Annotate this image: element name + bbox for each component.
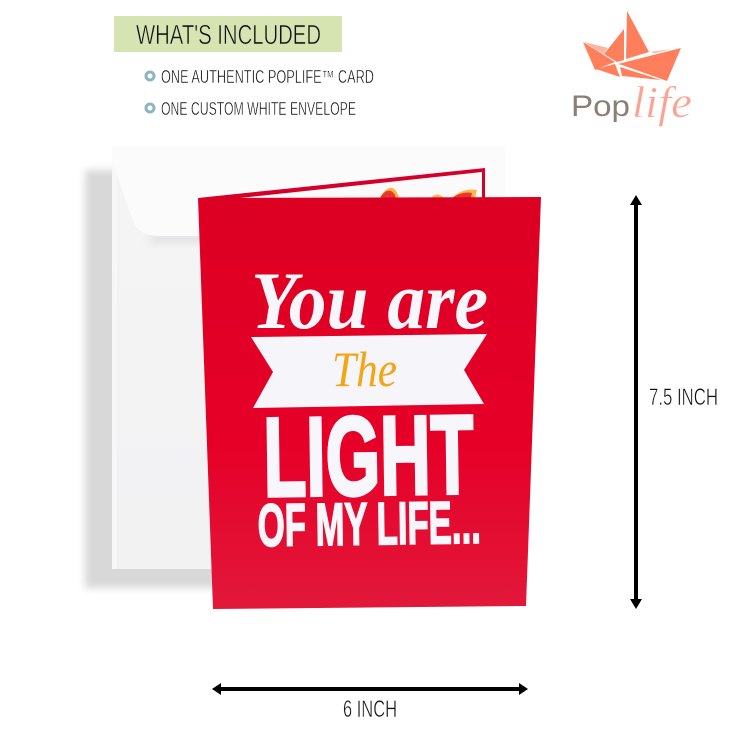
list: included items	[146, 67, 374, 119]
list: included items: ONE AUTHENTIC POPLIFE™ CARD	[161, 67, 374, 87]
logo: Poplife: life	[632, 78, 692, 127]
card front	[198, 197, 541, 609]
logo: Poplife	[571, 11, 692, 127]
hearts peeking	[380, 188, 399, 198]
flap shadow	[150, 236, 210, 242]
ribbon banner	[251, 334, 487, 408]
envelope shadow	[85, 170, 220, 588]
card text: You are: You are	[251, 255, 488, 346]
card back leaf	[198, 168, 485, 198]
card text: LIGHT: LIGHT	[263, 393, 474, 521]
wordmark: Pop	[571, 90, 630, 123]
label: 6 inch: 6 INCH	[343, 696, 397, 723]
envelope body	[112, 146, 505, 569]
card text: OF MY LIFE: OF MY LIFE...	[257, 489, 481, 559]
heading: what's included: WHAT'S INCLUDED	[136, 19, 321, 50]
card text: The: The	[332, 341, 397, 397]
list: included items: ONE CUSTOM WHITE ENVELOPE	[161, 99, 356, 119]
icon: origami boat	[583, 11, 681, 81]
envelope	[85, 146, 505, 588]
arrow: height 7.5 inch	[630, 195, 642, 609]
heading: what's included	[114, 16, 342, 52]
envelope flap	[112, 146, 505, 236]
arrow: width 6 inch	[212, 683, 528, 695]
